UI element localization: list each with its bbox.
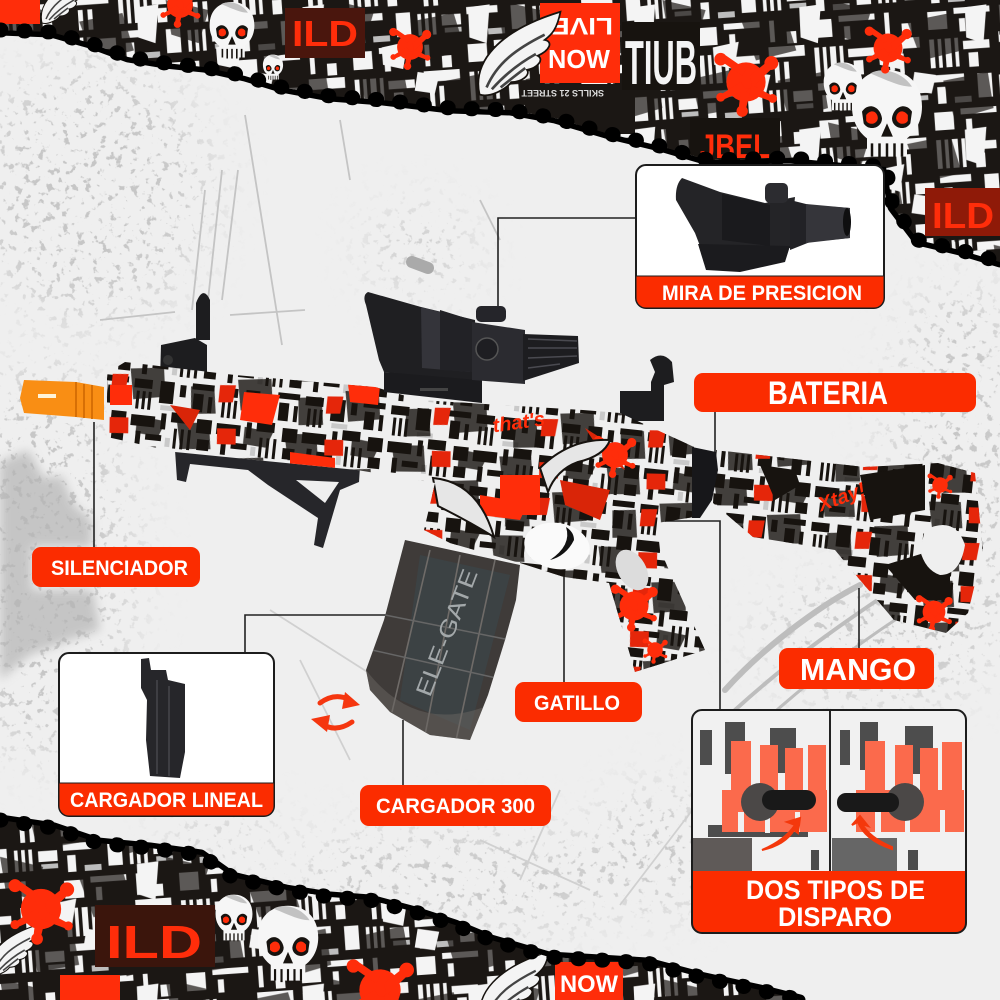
red caption bar: MIRA DE PRESICION — [662, 282, 862, 305]
icon: straight magazine — [141, 658, 185, 778]
red sticker: NOW bottom: NOW — [560, 971, 618, 998]
panel: cargador lineal — [59, 653, 274, 816]
red sticker: ILD right: ILD — [932, 195, 994, 236]
rotation arrows icon — [311, 692, 360, 732]
orange muzzle — [20, 380, 104, 420]
sticker lettering: red JBEL — [690, 118, 780, 160]
red caption bar: DOS TIPOS DE — [746, 875, 925, 905]
label: cargador 300: CARGADOR 300 — [376, 795, 535, 818]
stock — [713, 450, 983, 633]
label: mango: MANGO — [800, 652, 916, 687]
label: silenciador — [32, 547, 200, 587]
sticker wing left — [0, 926, 34, 974]
label: mango — [779, 648, 934, 689]
red caption bar — [692, 871, 966, 933]
top sticker band — [0, 0, 1000, 270]
label: bateria — [694, 373, 976, 412]
receiver and handguard: that's — [491, 408, 546, 437]
red sticker: ILD bottom — [95, 905, 215, 968]
drum magazine — [366, 540, 520, 740]
red sticker: NOW bottom — [555, 962, 623, 1000]
label: silenciador: SILENCIADOR — [51, 557, 188, 580]
bottom sticker band — [0, 815, 800, 1000]
wing sticker — [478, 12, 560, 95]
red splats bottom — [8, 879, 74, 945]
gun — [20, 292, 1000, 760]
red sticker: LIVE NOW — [540, 3, 620, 83]
stock: Xtay! — [814, 479, 869, 517]
panel: dos tipos de disparo — [692, 710, 966, 933]
label: gatillo: GATILLO — [534, 692, 620, 715]
front sight — [160, 293, 210, 380]
red caption bar — [636, 276, 884, 308]
red sticker: LIVE NOW: NOW — [548, 44, 610, 74]
scope — [364, 292, 579, 384]
photo: selector right — [832, 722, 964, 871]
red sticker: ILD: ILD — [292, 13, 358, 54]
trigger guard opening — [521, 518, 593, 574]
magazine lettering: ELE-GATE — [410, 565, 483, 700]
connector lines — [94, 218, 859, 785]
wing sticker bottom — [480, 951, 549, 1000]
label: bateria: BATERIA — [768, 375, 888, 411]
red sticker: ILD — [285, 8, 365, 58]
foregrip — [175, 450, 360, 548]
red splats — [714, 53, 778, 117]
panel: mira de presicion — [636, 165, 884, 308]
skull stickers — [852, 70, 922, 158]
label: cargador 300 — [360, 785, 551, 826]
skull stickers bottom — [258, 906, 318, 982]
sticker lettering: OUT: TIUB — [625, 29, 697, 98]
sticker lettering: red JBEL: JBEL — [700, 128, 770, 166]
red sticker: LIVE NOW: LIVE — [551, 12, 613, 39]
sticker lettering: OUT — [622, 22, 700, 90]
small caption: skills street: SKILLS 21 STREET — [521, 88, 604, 98]
red sticker: ILD right — [925, 188, 1000, 236]
icon: scope photo — [676, 178, 851, 272]
red caption bar — [59, 783, 274, 816]
red sticker: ILD bottom: ILD — [106, 916, 202, 968]
red caption bar: DISPARO — [778, 902, 892, 932]
scope mount — [384, 372, 482, 403]
buffer ring — [692, 447, 718, 518]
label: gatillo — [515, 682, 642, 722]
receiver and handguard — [100, 355, 710, 685]
red caption bar: CARGADOR LINEAL — [70, 789, 263, 812]
photo: selector left — [692, 722, 827, 871]
rear sight — [620, 355, 674, 421]
